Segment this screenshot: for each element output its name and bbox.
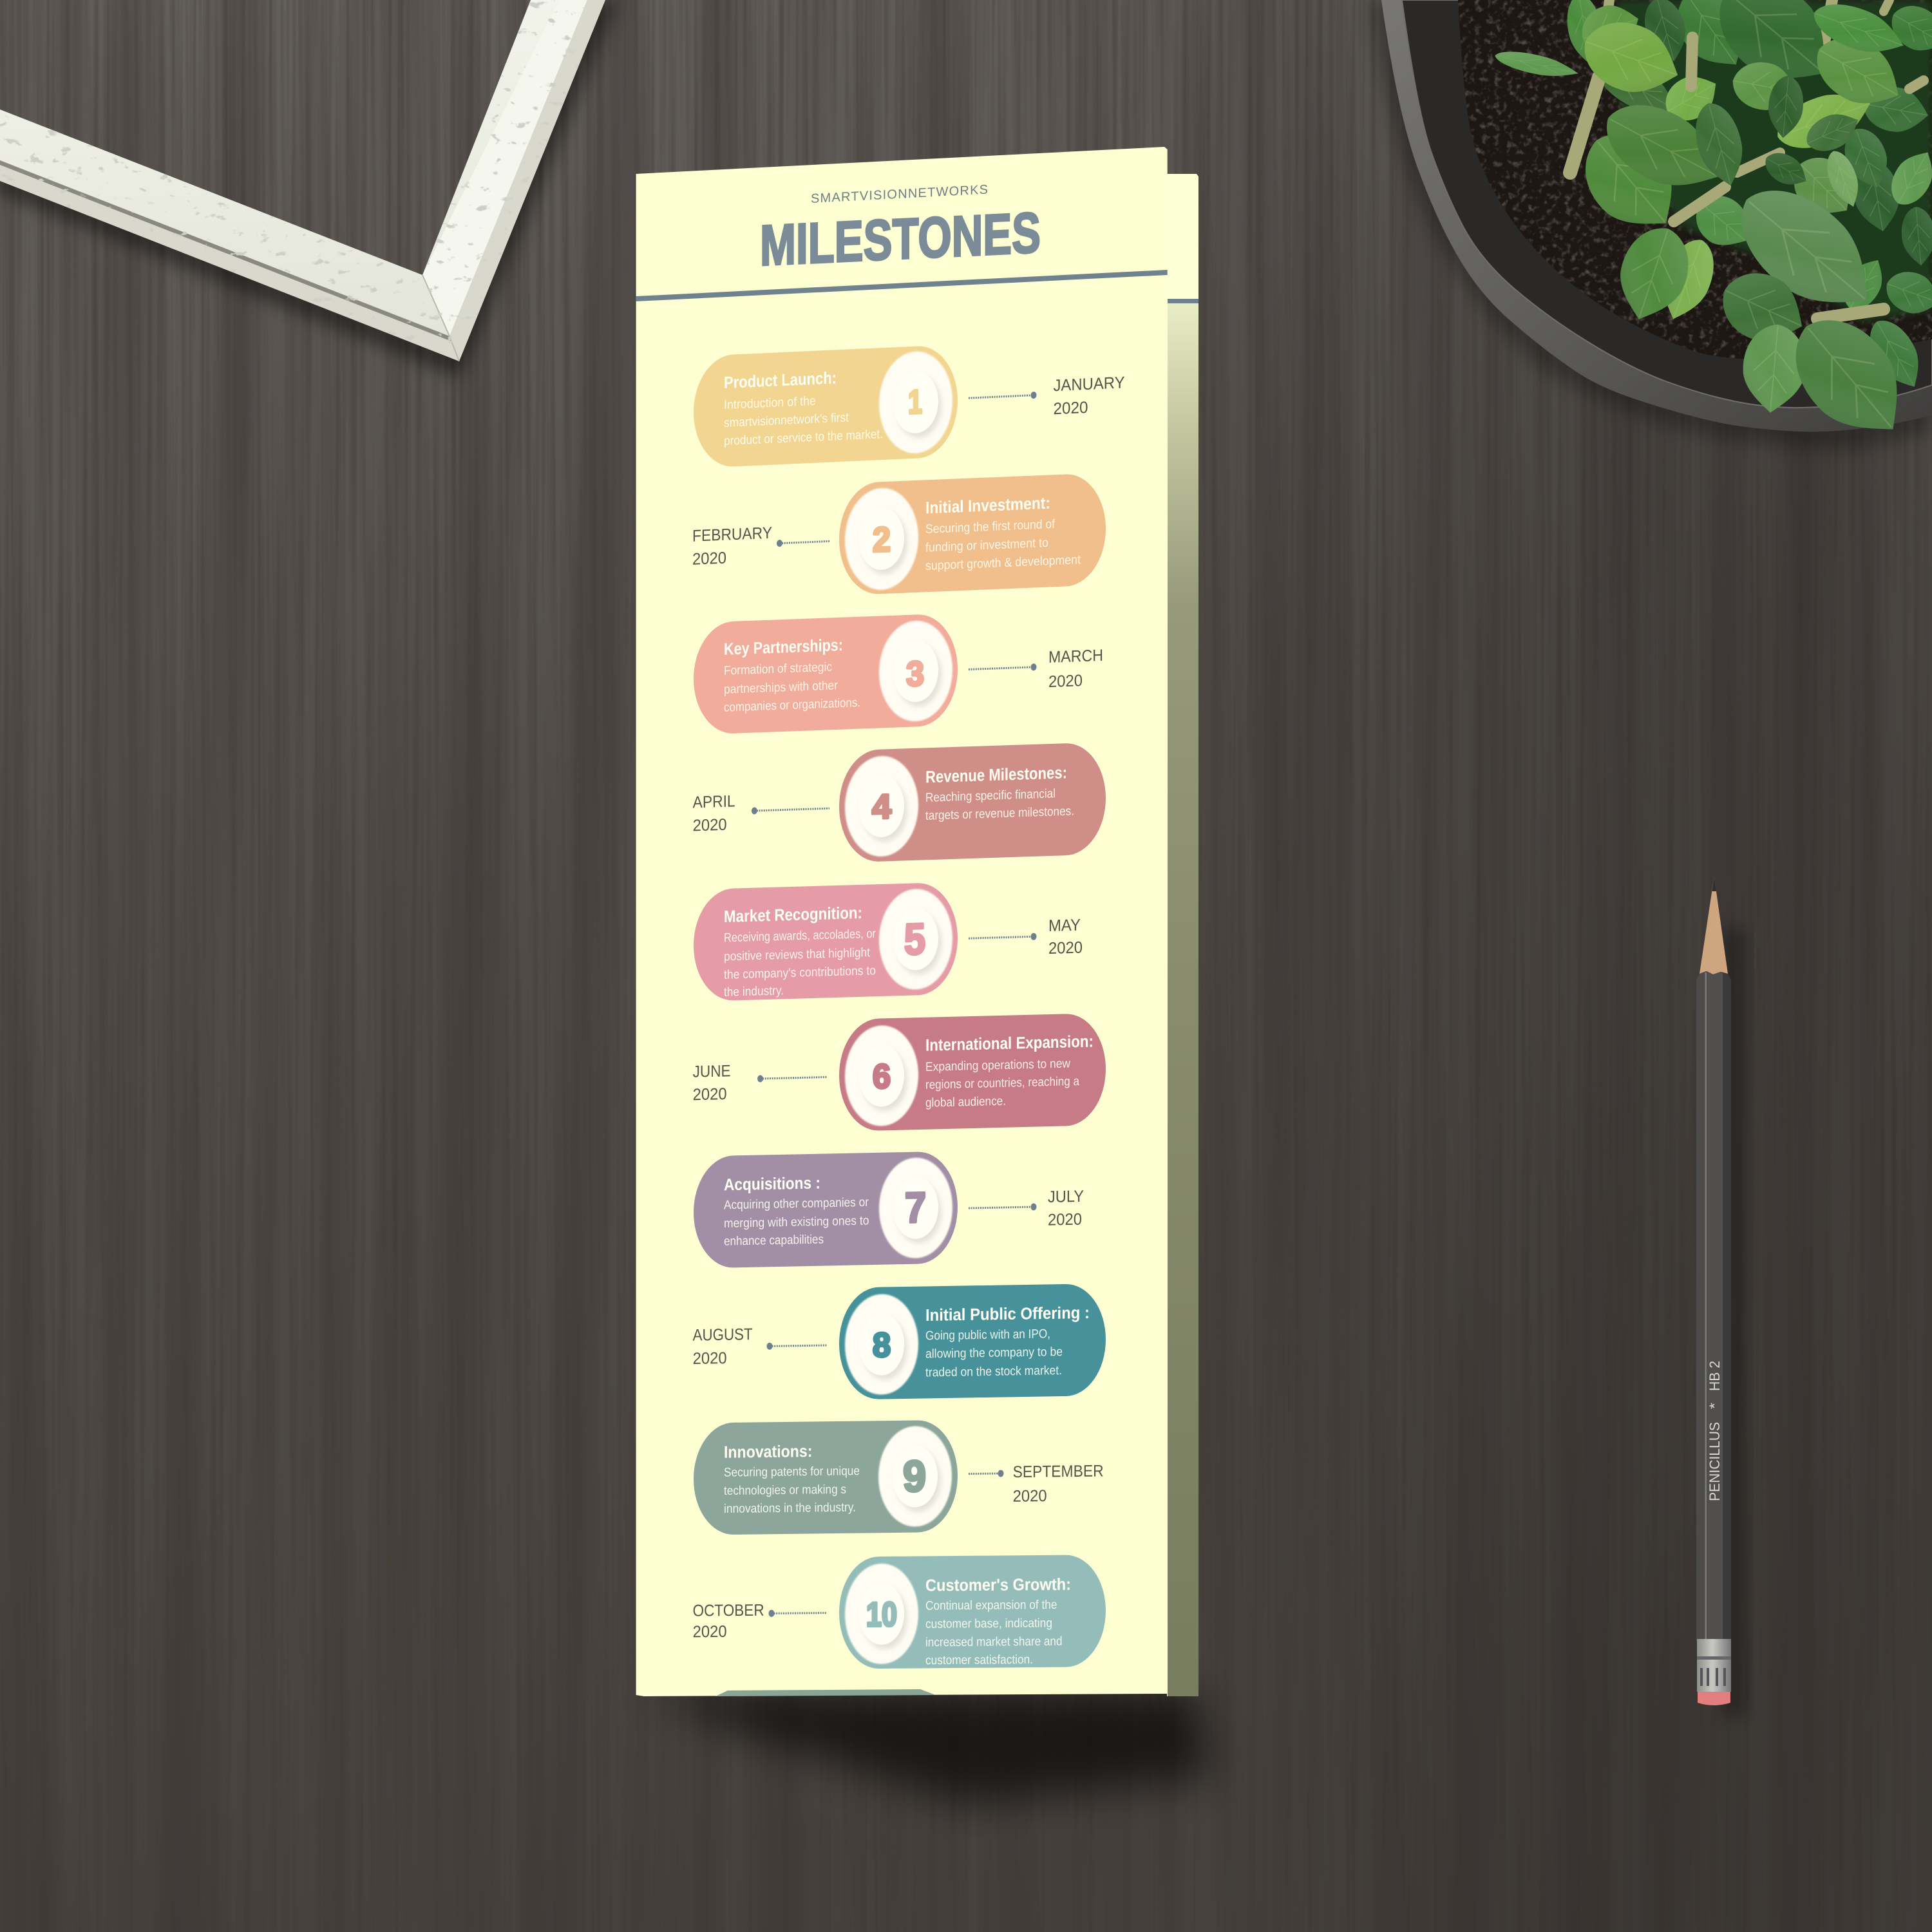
date: 2020 [693, 816, 727, 835]
plant foliage [1493, 0, 1932, 457]
description: support growth & development [925, 553, 1081, 573]
connector [777, 538, 829, 547]
brand name: SMARTVISIONNETWORKS [811, 183, 988, 206]
heading: Product Launch: [724, 368, 837, 392]
connector [969, 663, 1037, 673]
description: Securing the first round of [925, 517, 1056, 536]
milestone 3: key partnerships [694, 608, 1103, 735]
connector [769, 1609, 827, 1617]
description: technologies or making s [724, 1482, 846, 1498]
description: Formation of strategic [724, 660, 832, 678]
pencil label [1707, 1361, 1723, 1501]
header rule [636, 270, 1168, 301]
description: the industry. [724, 983, 784, 999]
description: global audience. [925, 1094, 1006, 1110]
pencil shadow [1721, 927, 1747, 1716]
date: 2020 [1048, 939, 1083, 958]
date [693, 1602, 764, 1641]
description: Expanding operations to new [925, 1056, 1071, 1074]
date [692, 524, 772, 569]
brochure shadow on desk [644, 1690, 1211, 1803]
date: 2020 [1048, 672, 1083, 691]
pencil label: * [1707, 1402, 1723, 1409]
description: customer base, indicating [925, 1616, 1052, 1631]
date [1054, 374, 1124, 418]
description [925, 1056, 1079, 1110]
description: funding or investment to [925, 536, 1048, 555]
date: 2020 [693, 1623, 727, 1641]
description [925, 516, 1081, 573]
peek of cropped next milestone pill [715, 1689, 936, 1696]
description: positive reviews that highlight [724, 945, 871, 964]
description [925, 786, 1074, 823]
date: OCTOBER [693, 1602, 764, 1620]
pot rim [1381, 0, 1932, 431]
date: AUGUST [693, 1325, 753, 1345]
pencil wood tip [1700, 876, 1728, 974]
pencil eraser [1698, 1692, 1730, 1705]
date: MAY [1048, 916, 1081, 935]
date: FEBRUARY [692, 524, 772, 545]
description: regions or countries, reaching a [925, 1074, 1079, 1092]
number badge: 9 [903, 1452, 926, 1501]
description [724, 927, 876, 999]
description: merging with existing ones to [724, 1213, 869, 1231]
milestone 4: revenue milestones [693, 742, 1106, 867]
pot drop shadow [1368, 0, 1932, 450]
description: smartvisionnetwork's first [724, 410, 849, 430]
description: companies or organizations. [724, 696, 860, 715]
picture frame corner [0, 0, 618, 377]
date [693, 1325, 753, 1368]
milestone 7: acquisitions [694, 1148, 1084, 1269]
description: enhance capabilities [724, 1233, 824, 1249]
date: APRIL [693, 792, 735, 811]
number badge [879, 1157, 952, 1259]
date: 2020 [693, 1085, 727, 1104]
pencil label: PENICILLUS [1707, 1422, 1723, 1501]
number badge: 8 [873, 1326, 891, 1365]
milestone 2: initial investment [692, 473, 1106, 601]
title: MILESTONES [760, 200, 1041, 278]
heading: Revenue Milestones: [925, 762, 1067, 786]
soil [1458, 0, 1932, 374]
pill [839, 1283, 1106, 1400]
heading: Innovations: [724, 1441, 813, 1462]
heading: International Expansion: [925, 1031, 1094, 1055]
milestone 5: market recognition [694, 878, 1083, 1001]
date: JUNE [693, 1062, 731, 1081]
number badge: 4 [872, 788, 892, 826]
brochure back panel [1167, 174, 1198, 1696]
number badge [879, 888, 952, 990]
heading: Initial Public Offering : [925, 1303, 1090, 1325]
description [925, 1598, 1063, 1667]
date: JULY [1048, 1188, 1084, 1206]
milestone 8: initial public offering [693, 1283, 1106, 1402]
number badge [845, 1563, 918, 1664]
number badge [879, 350, 952, 455]
date: MARCH [1048, 647, 1103, 667]
milestone 10: customer's growth [693, 1555, 1106, 1670]
date: 2020 [1013, 1487, 1047, 1506]
number badge: 6 [873, 1057, 891, 1096]
number badge [845, 1025, 918, 1127]
description: Continual expansion of the [925, 1598, 1057, 1613]
brochure front panel [636, 147, 1168, 1696]
number badge: 10 [866, 1596, 897, 1634]
number badge: 5 [904, 914, 925, 964]
heading: Initial Investment: [925, 493, 1050, 517]
number badge [878, 1426, 952, 1527]
pill [694, 613, 958, 735]
pot interior [1402, 0, 1932, 408]
plant pot [1368, 0, 1932, 457]
date [693, 1062, 731, 1104]
number badge: 3 [906, 654, 924, 694]
pill [694, 882, 958, 1001]
connector [752, 805, 829, 815]
description: customer satisfaction. [925, 1653, 1033, 1667]
pill [839, 473, 1106, 596]
pill [694, 1151, 958, 1269]
date: JANUARY [1054, 374, 1124, 395]
description: increased market share and [925, 1634, 1063, 1649]
pencil [1696, 876, 1747, 1716]
number badge [845, 755, 918, 858]
description: product or service to the market. [724, 427, 883, 448]
date [693, 792, 735, 835]
pill [839, 1555, 1106, 1669]
description: traded on the stock market. [925, 1363, 1062, 1379]
connector [766, 1341, 827, 1350]
date: 2020 [1054, 399, 1088, 418]
description: partnerships with other [724, 678, 838, 697]
milestone 6: international expansion [693, 1013, 1106, 1135]
description: allowing the company to be [925, 1345, 1063, 1361]
heading: Market Recognition: [724, 903, 862, 926]
date [1013, 1462, 1104, 1506]
date [1048, 916, 1083, 958]
pill [839, 742, 1106, 863]
description: Securing patents for unique [724, 1464, 860, 1480]
description [724, 1195, 869, 1249]
pencil body [1696, 971, 1731, 1641]
pencil ferrule [1697, 1639, 1731, 1692]
number badge [879, 620, 952, 723]
number badge [845, 1294, 918, 1395]
description [724, 659, 860, 715]
number badge: 1 [908, 383, 922, 421]
description: Receiving awards, accolades, or [724, 927, 876, 945]
description [724, 1464, 860, 1516]
connector [969, 1470, 1003, 1477]
description [925, 1327, 1063, 1379]
connector [969, 392, 1037, 402]
description: Reaching specific financial [925, 786, 1056, 805]
number badge: 2 [873, 520, 891, 560]
description: Going public with an IPO, [925, 1327, 1050, 1343]
milestone 9: innovations [694, 1418, 1104, 1535]
date [1048, 1188, 1084, 1229]
connector [757, 1074, 827, 1083]
pill [694, 1420, 958, 1535]
pencil label: HB 2 [1707, 1361, 1723, 1391]
pill [694, 345, 958, 468]
heading: Acquisitions : [724, 1173, 820, 1194]
connector [969, 1203, 1037, 1212]
milestone 1: product launch [694, 337, 1124, 468]
date [1048, 647, 1103, 691]
description: Introduction of the [724, 394, 816, 412]
connector [969, 933, 1037, 942]
number badge: 7 [905, 1183, 926, 1231]
date: 2020 [1048, 1211, 1082, 1229]
date: SEPTEMBER [1013, 1462, 1104, 1481]
date: 2020 [693, 1349, 727, 1368]
heading: Customer's Growth: [925, 1575, 1071, 1595]
description: targets or revenue milestones. [925, 804, 1074, 823]
pill [839, 1013, 1106, 1132]
heading: Key Partnerships: [724, 635, 843, 659]
description: innovations in the industry. [724, 1501, 856, 1516]
description: Acquiring other companies or [724, 1195, 869, 1212]
description [724, 391, 883, 448]
description: the company's contributions to [724, 963, 876, 982]
date: 2020 [692, 549, 726, 569]
number badge [845, 487, 918, 591]
